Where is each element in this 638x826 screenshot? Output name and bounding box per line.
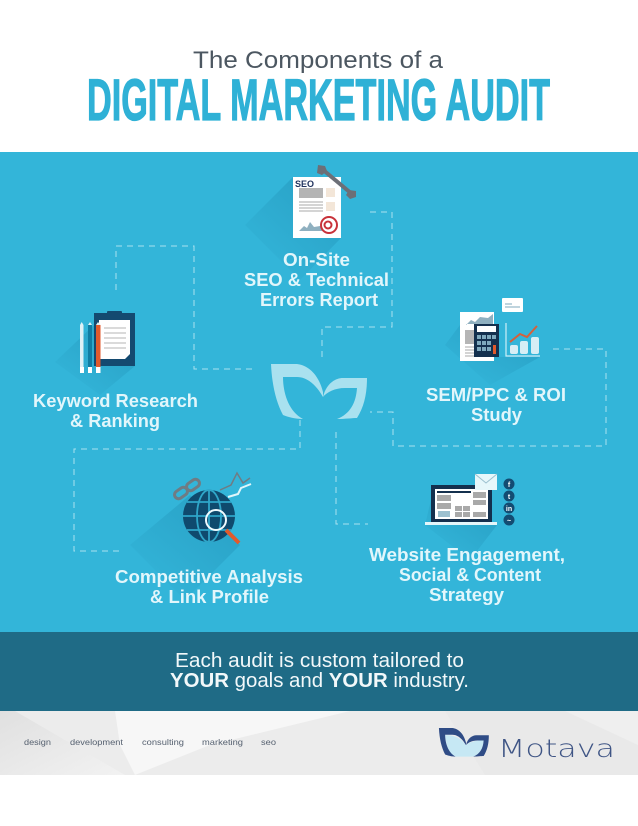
label: SEM/PPC: [426, 385, 566, 425]
label: website engagement: Website Engagement,: [369, 545, 565, 565]
title: The Components of a: [193, 47, 444, 74]
footer services list: development: [70, 737, 124, 747]
footer logo: [439, 728, 615, 763]
label: SEM/PPC: Study: [471, 405, 522, 425]
label: on-site SEO: Errors Report: [260, 290, 378, 310]
label: on-site SEO: [244, 250, 389, 310]
panel: tagline banner: YOUR goals and YOUR industry.: [170, 670, 469, 692]
label: website engagement: Social & Content: [399, 565, 541, 585]
dashed connectors: [74, 212, 606, 551]
icon: laptop, envelope, social: [425, 474, 514, 560]
icon: SEO report with wrench: SEO: [295, 179, 314, 189]
component: on-site SEO: [244, 165, 389, 310]
footer logo: Motava: [498, 734, 615, 763]
label: keyword research: & Ranking: [70, 411, 160, 431]
icon: laptop, envelope, social: f: [508, 482, 511, 489]
label: on-site SEO: SEO & Technical: [244, 270, 389, 290]
component: keyword research: [33, 311, 198, 431]
label: website engagement: [369, 545, 565, 605]
footer services list: seo: [261, 737, 276, 747]
icon: SEO report with wrench: [245, 165, 356, 280]
icon: laptop, envelope, social: ~: [507, 518, 511, 525]
label: SEM/PPC: SEM/PPC & ROI: [426, 385, 566, 405]
footer services list: marketing: [202, 737, 243, 747]
icon: laptop, envelope, social: t: [508, 494, 511, 501]
label: competitive analysis: [115, 567, 303, 607]
panel: tagline banner: [0, 632, 638, 711]
icon: globe, chain, magnifier: [130, 473, 251, 600]
label: website engagement: Strategy: [429, 585, 504, 605]
label: on-site SEO: On-Site: [283, 250, 350, 270]
footer services list: [24, 737, 276, 747]
icon: clipboard and pencils: [55, 311, 135, 395]
label: competitive analysis: & Link Profile: [150, 587, 269, 607]
component: website engagement: [369, 474, 565, 605]
label: competitive analysis: Competitive Analysis: [115, 567, 303, 587]
icon: laptop, envelope, social: in: [506, 506, 512, 513]
footer services list: consulting: [142, 737, 184, 747]
panel: tagline banner: Each audit is custom tailored to: [175, 650, 464, 672]
label: keyword research: Keyword Research: [33, 391, 198, 411]
central leaf logo: [271, 364, 367, 419]
footer services list: design: [24, 737, 51, 747]
component: competitive analysis: [115, 473, 303, 607]
panel: blue components area: [0, 152, 638, 632]
title: [87, 47, 550, 133]
component: SEM/PPC: [426, 298, 566, 425]
icon: calculator, report, chart: [445, 298, 540, 385]
panel: footer: [0, 711, 638, 775]
label: keyword research: [33, 391, 198, 431]
